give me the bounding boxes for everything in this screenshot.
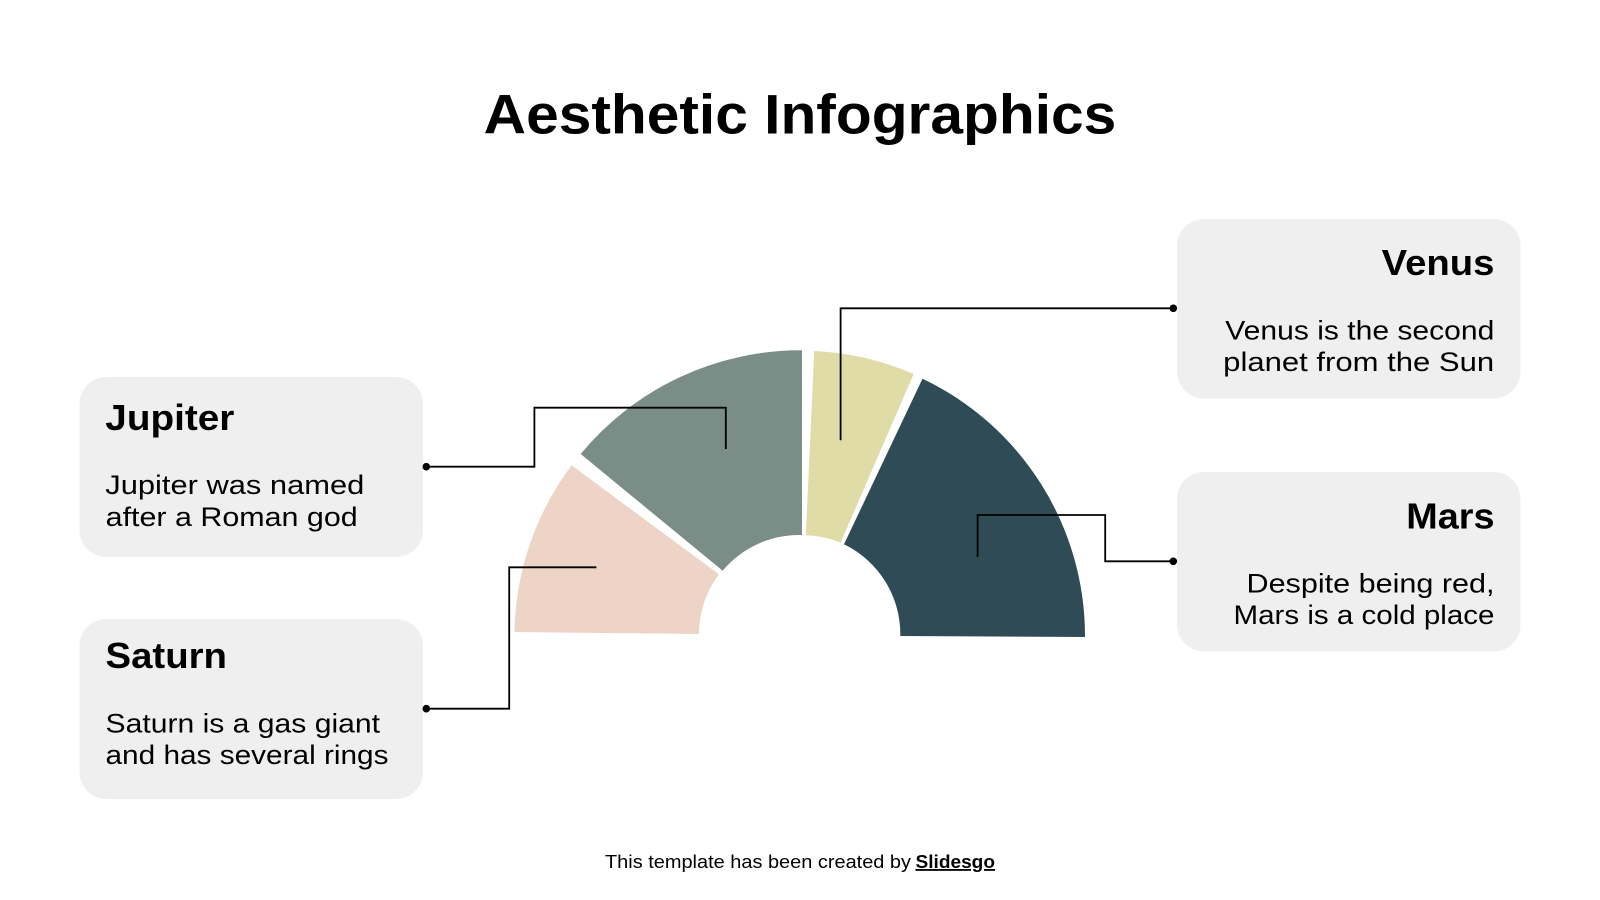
segment: Saturn xyxy=(514,465,719,634)
text: Venus description: planet from the Sun xyxy=(1223,347,1494,377)
segment: Jupiter xyxy=(581,350,802,571)
heading: Venus: Venus xyxy=(1382,242,1494,283)
text: Jupiter description xyxy=(105,470,364,532)
panel: Saturn xyxy=(80,619,423,799)
heading: Mars: Mars xyxy=(1406,495,1494,536)
text: Venus description: Venus is the second xyxy=(1225,315,1494,345)
panel: Venus xyxy=(1177,219,1520,398)
panel: Jupiter xyxy=(80,377,423,557)
footer credit: This template has been created by xyxy=(605,851,912,872)
text: Venus description xyxy=(1223,315,1494,377)
heading: Jupiter: Jupiter xyxy=(105,397,234,438)
heading: Saturn: Saturn xyxy=(106,635,227,676)
text: Mars description xyxy=(1234,569,1494,630)
footer credit: Slidesgo xyxy=(916,851,995,872)
text: Jupiter description: after a Roman god xyxy=(106,502,358,532)
text: Saturn description: and has several rings xyxy=(106,740,388,770)
text: Mars description: Despite being red, xyxy=(1246,569,1494,599)
segment: Venus xyxy=(806,351,914,543)
text: Saturn description xyxy=(106,709,388,770)
connector: Mars xyxy=(978,515,1177,565)
connector: Jupiter xyxy=(422,408,726,471)
text: Jupiter description: Jupiter was named xyxy=(105,470,364,500)
title: Aesthetic Infographics xyxy=(484,83,1116,146)
segment: Mars xyxy=(844,379,1085,637)
connector: Saturn xyxy=(422,567,596,712)
text: Mars description: Mars is a cold place xyxy=(1234,600,1494,630)
panel: Mars xyxy=(1177,472,1520,652)
text: Saturn description: Saturn is a gas giant xyxy=(106,709,381,739)
connector: Venus xyxy=(841,304,1177,440)
semicircle chart xyxy=(514,350,1085,637)
